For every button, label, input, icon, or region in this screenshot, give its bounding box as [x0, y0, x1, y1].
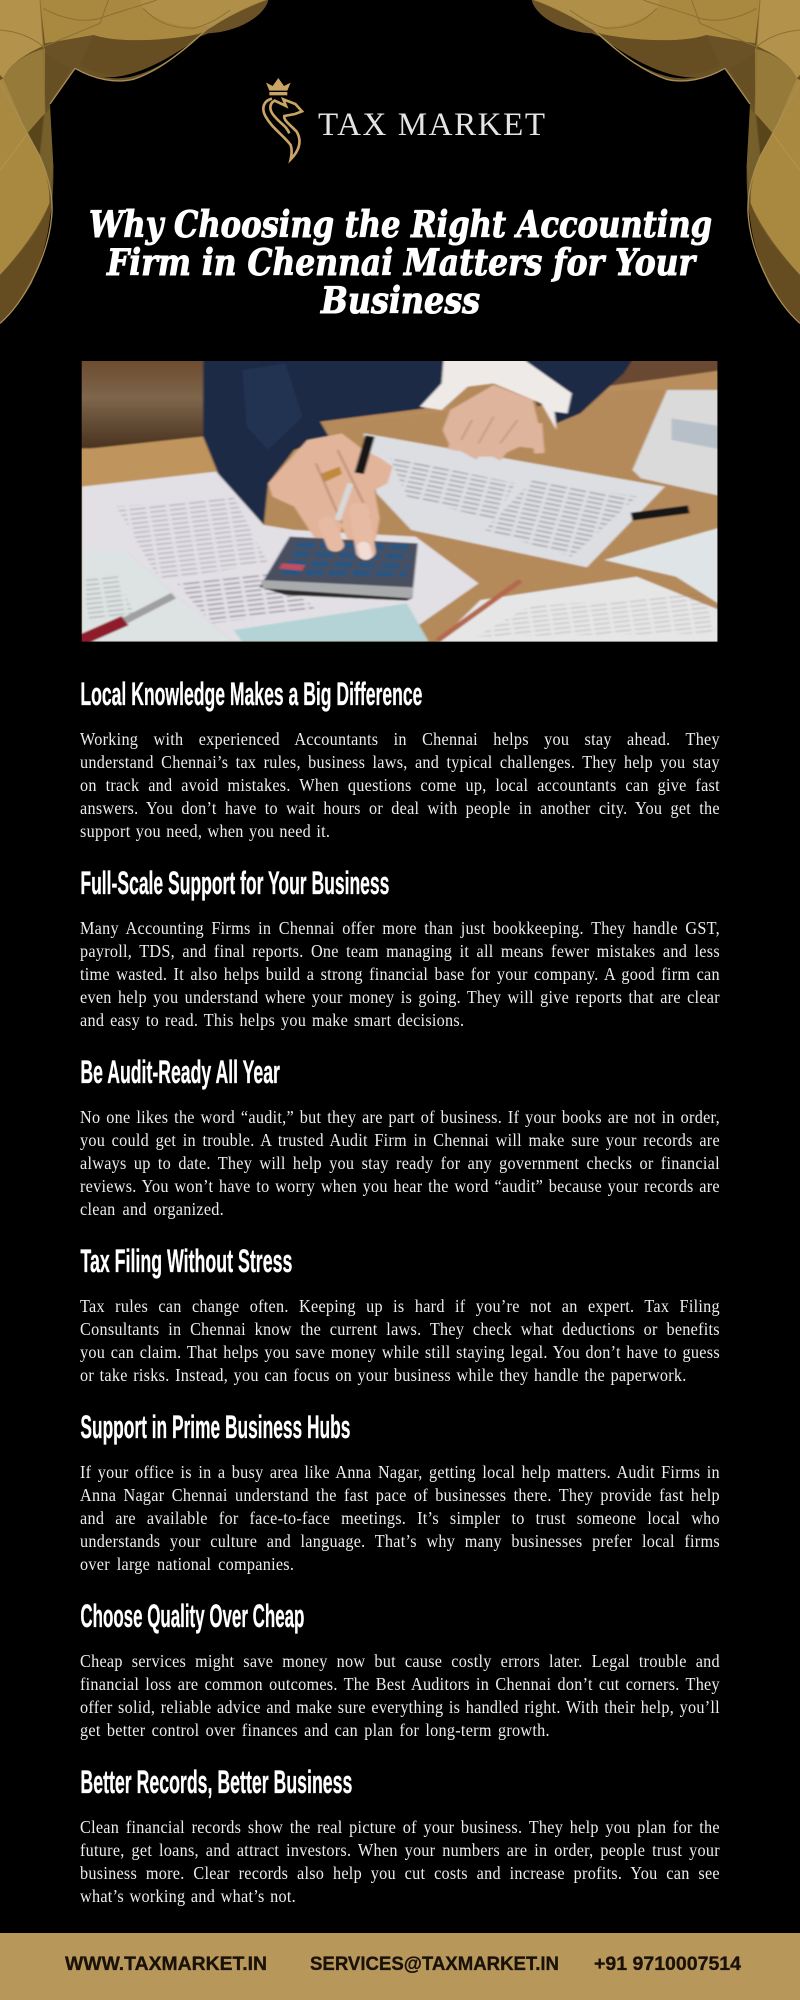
right curtain [532, 0, 800, 323]
text block: quality over cheap: offer solid, reliable advice and make sure everything is handled right. With their help, you’ll [80, 1697, 720, 1717]
text block: local knowledge [80, 729, 720, 841]
photo: hands using a calculator over tax forms [82, 361, 718, 642]
text block: audit ready: reviews. You won’t have to worry when you hear the word “audit” because your records are [80, 1176, 720, 1196]
heading: local knowledge: Local Knowledge Makes a Big Difference [80, 676, 422, 712]
title [89, 204, 712, 322]
text block: audit ready: always up to date. They will help you stay ready for any government checks or financial [80, 1153, 720, 1173]
text block: full-scale support: Many Accounting Firms in Chennai offer more than just bookkeeping. They handle GST, [80, 918, 720, 938]
text block: prime business hubs: over large national companies. [80, 1554, 295, 1574]
text block: tax filing: you can claim. That helps you save money while still staying legal. You don’t have to guess [80, 1342, 720, 1362]
logo wordmark: TAX MARKET [318, 107, 545, 143]
text block: full-scale support: time wasted. It also helps build a strong financial base for your company. A good firm can [80, 964, 720, 984]
text block: prime business hubs [80, 1462, 720, 1574]
phone: +91 9710007514 [594, 1954, 741, 1975]
text block: better records: what’s working and what’s not. [80, 1886, 296, 1906]
heading: audit ready: Be Audit-Ready All Year [80, 1054, 280, 1090]
papers [82, 472, 478, 642]
text block: better records [80, 1817, 720, 1906]
text block: prime business hubs: understands your culture and language. That’s why many businesses prefer local firms [80, 1531, 720, 1551]
title: Business [320, 280, 480, 322]
text block: better records: business more. Clear records also help you cut costs and increase profits. You can see [80, 1863, 720, 1883]
text block: tax filing: Consultants in Chennai know the current laws. They check what deductions or benefits [80, 1319, 720, 1339]
pen cap [632, 509, 689, 517]
text block: full-scale support: and easy to read. This helps you make smart decisions. [80, 1010, 465, 1030]
text block: tax filing [80, 1296, 720, 1385]
text block: local knowledge: on track and avoid mistakes. When questions come up, local accountants can give fast [80, 775, 720, 795]
pen [359, 436, 370, 473]
text block: quality over cheap: Cheap services might save money now but cause costly errors later. Legal trouble and [80, 1651, 720, 1671]
title: Why Choosing the Right Accounting [89, 204, 712, 246]
text block: local knowledge: support you need, when you need it. [80, 821, 331, 841]
text block: full-scale support: payroll, TDS, and final reports. One team managing it all means fewer mistakes and less [80, 941, 720, 961]
heading: full-scale support: Full-Scale Support for Your Business [80, 865, 389, 901]
text block: full-scale support [80, 918, 720, 1030]
text block: full-scale support: even help you understand where your money is going. They will give reports that are clear [80, 987, 720, 1007]
heading: tax filing: Tax Filing Without Stress [80, 1243, 292, 1279]
right hand [442, 385, 545, 457]
logo [263, 78, 545, 159]
text block: better records: future, get loans, and attract investors. When your numbers are in order, people trust your [80, 1840, 720, 1860]
red pen [77, 621, 125, 642]
website: WWW.TAXMARKET.IN [65, 1954, 267, 1975]
heading: better records: Better Records, Better Business [80, 1764, 352, 1800]
text block: local knowledge: understand Chennai’s tax rules, business laws, and typical challenges. They help you stay [80, 752, 720, 772]
text block: tax filing: or take risks. Instead, you can focus on your business while they handle the paperwork. [80, 1365, 687, 1385]
text block: quality over cheap [80, 1651, 720, 1740]
text block: local knowledge: Working with experienced Accountants in Chennai helps you stay ahead. They [80, 729, 720, 749]
pencil [437, 581, 521, 641]
text block: audit ready: No one likes the word “audit,” but they are part of business. If your books are not in order, [80, 1107, 720, 1127]
text block: prime business hubs: Anna Nagar Chennai understand the fast pace of businesses there. They provide fast help [80, 1485, 720, 1505]
heading: quality over cheap: Choose Quality Over Cheap [80, 1598, 304, 1634]
icon: crown and lion [263, 78, 302, 159]
laptop [632, 390, 724, 497]
text block: audit ready: you could get in trouble. A trusted Audit Firm in Chennai will make sure your records are [80, 1130, 720, 1150]
text block: prime business hubs: and are available for face-to-face meetings. It’s simpler to trust someone local who [80, 1508, 720, 1528]
header: curtains, logo and title [0, 0, 800, 324]
email: SERVICES@TAXMARKET.IN [310, 1954, 559, 1975]
calculator [259, 537, 418, 598]
title: Firm in Chennai Matters for Your [106, 242, 698, 284]
left curtain [0, 0, 268, 323]
text block: audit ready: clean and organized. [80, 1199, 224, 1219]
text block: local knowledge: answers. You don’t have to wait hours or deal with people in another city. You get the [80, 798, 720, 818]
footer contact bar [0, 1933, 800, 2000]
heading: prime business hubs: Support in Prime Business Hubs [80, 1409, 350, 1445]
left hand [266, 432, 394, 542]
text block: better records: Clean financial records show the real picture of your business. They help you plan for the [80, 1817, 720, 1837]
text block: audit ready [80, 1107, 720, 1219]
text block: prime business hubs: If your office is in a busy area like Anna Nagar, getting local help matters. Audit Firms in [80, 1462, 720, 1482]
text block: quality over cheap: financial loss are common outcomes. The Best Auditors in Chennai don’t cut corners. They [80, 1674, 720, 1694]
suit [203, 357, 446, 525]
shirt [420, 357, 572, 430]
text block: quality over cheap: get better control over finances and can plan for long-term growth. [80, 1720, 550, 1740]
text block: tax filing: Tax rules can change often. Keeping up is hard if you’re not an expert. Tax Filing [80, 1296, 720, 1316]
